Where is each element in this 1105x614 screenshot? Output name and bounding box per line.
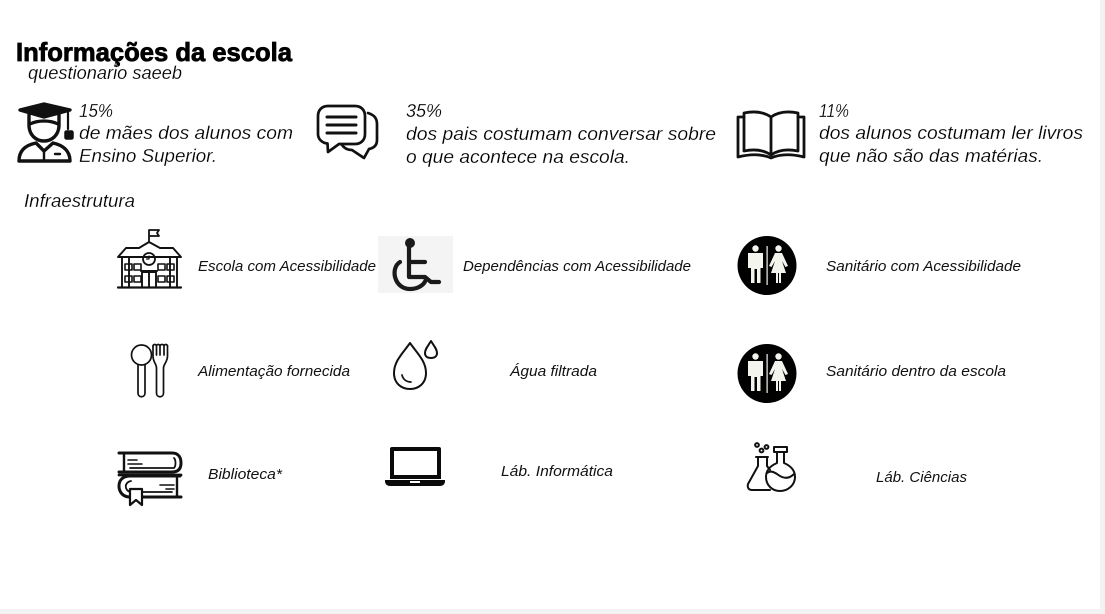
icon: graduate <box>19 104 73 161</box>
icon: open book <box>738 112 804 158</box>
item: agua filtrada <box>394 341 597 389</box>
text: students line 1: dos alunos costumam ler livros <box>819 122 1083 143</box>
text: Láb. Informática <box>501 463 613 480</box>
text: parents line 2: o que acontece na escola. <box>406 146 630 167</box>
item: sanitario dentro da escola <box>738 344 1006 403</box>
item: biblioteca <box>119 453 283 505</box>
icon: restroom sign <box>738 344 796 403</box>
icon: restroom sign <box>738 236 796 295</box>
item: sanitario com acessibilidade <box>738 236 1021 295</box>
text: Biblioteca* <box>208 466 283 483</box>
item: escola com acessibilidade <box>118 230 376 288</box>
text: Láb. Ciências <box>876 469 967 486</box>
text: Água filtrada <box>509 363 597 380</box>
text: Sanitário com Acessibilidade <box>826 258 1021 275</box>
icon: flasks <box>748 443 795 491</box>
panel: mothers with higher education <box>19 100 293 166</box>
item: dependencias com acessibilidade <box>378 236 691 293</box>
text: Alimentação fornecida <box>197 363 350 380</box>
icon: water drops <box>394 341 437 389</box>
text: 35%: 35% <box>406 100 442 121</box>
title: Informações da escola <box>16 37 293 67</box>
text: students line 2: que não são das matérias. <box>819 145 1043 166</box>
text: mothers line 1: de mães dos alunos com <box>79 122 293 143</box>
icon: spoon and fork <box>132 344 168 397</box>
icon: school building <box>118 230 181 288</box>
subtitle: questionario saeeb <box>28 62 182 83</box>
text: 15%: 15% <box>79 100 113 121</box>
item: alimentacao fornecida <box>132 344 350 397</box>
panel: parents talk about school <box>318 100 716 167</box>
icon: speech bubbles <box>318 106 377 158</box>
icon: stacked books <box>119 453 181 505</box>
text: 11%: 11% <box>819 100 849 121</box>
heading: infraestrutura: Infraestrutura <box>24 190 135 211</box>
text: mothers line 2: Ensino Superior. <box>79 145 217 166</box>
text: Sanitário dentro da escola <box>826 363 1006 380</box>
text: parents line 1: dos pais costumam conversar sobre <box>406 123 716 144</box>
item: lab informatica <box>385 447 613 486</box>
icon: laptop <box>385 447 445 486</box>
text: Dependências com Acessibilidade <box>463 258 691 275</box>
panel: students read books <box>738 100 1083 166</box>
text: Escola com Acessibilidade <box>198 258 376 275</box>
item: lab ciencias <box>748 443 967 491</box>
icon: wheelchair <box>378 236 453 293</box>
